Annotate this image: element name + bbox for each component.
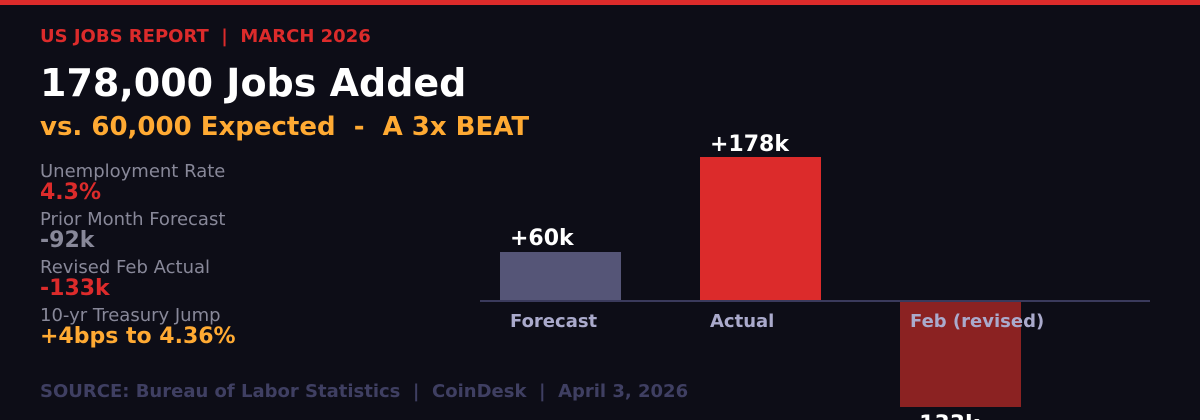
source footer: SOURCE: Bureau of Labor Statistics | CoinDesk | April 3, 2026 [40,381,688,402]
chart baseline [480,300,1150,302]
bar: Feb revised [900,301,1021,407]
stat: treasury jump: 10-yr Treasury Jump [40,305,221,326]
stat: treasury jump [40,305,236,349]
bar chart [480,132,1150,420]
bar: forecast [500,252,621,300]
stat: treasury jump: +4bps to 4.36% [40,324,236,349]
stat: revised Feb actual: Revised Feb Actual [40,257,210,278]
title: 178,000 Jobs Added [40,61,466,105]
stat: revised Feb actual: -133k [40,276,111,301]
category label: forecast: Forecast [510,311,598,332]
bar: actual [700,157,821,300]
stat: revised Feb actual [40,257,210,301]
stat: unemployment rate: Unemployment Rate [40,161,225,182]
stat: unemployment rate [40,161,225,205]
top accent bar [0,0,1200,5]
category label: Feb revised: Feb (revised) [910,311,1044,332]
stat: unemployment rate: 4.3% [40,180,101,205]
panel: key stats [40,161,236,349]
stat: prior month forecast: Prior Month Forecast [40,209,225,230]
eyebrow heading: US JOBS REPORT | MARCH 2026 [40,26,371,47]
category label: actual: Actual [710,311,774,332]
value label: forecast: +60k [510,226,575,251]
stat: prior month forecast: -92k [40,228,96,253]
stat: prior month forecast [40,209,225,253]
value label: actual: +178k [710,132,790,157]
subtitle: vs. 60,000 Expected - A 3x BEAT [40,112,529,142]
